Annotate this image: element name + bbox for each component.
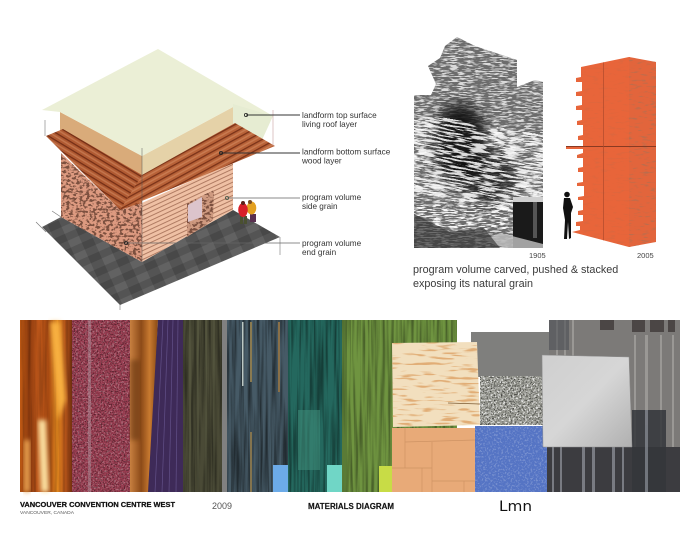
label: landform bottom surface: landform bottom surface <box>302 148 390 156</box>
landform bottom surface wood layer left <box>46 129 142 210</box>
1905 timber stack photo <box>414 37 543 248</box>
swatch: red fabric <box>72 320 130 492</box>
label: landform bottom surface: wood layer <box>301 156 342 166</box>
swatch: olive carpet <box>183 320 222 492</box>
caption: exposing its natural grain <box>413 278 533 290</box>
leader line: side grain <box>225 196 300 200</box>
program volume end grain wall <box>60 150 144 264</box>
program volume side grain wall <box>140 160 235 264</box>
footer <box>20 499 532 516</box>
swatch: purple fabric <box>148 320 183 492</box>
project location: VANCOUVER, CANADA <box>20 510 75 516</box>
label: end grain: end grain <box>302 248 337 257</box>
landform top surface <box>42 49 273 156</box>
swatch: strand board <box>390 340 482 430</box>
ground plane carpet <box>40 205 285 307</box>
swatch: copper fold <box>130 320 158 492</box>
project title: VANCOUVER CONVENTION CENTRE WEST <box>20 500 175 509</box>
swatch: dark carpet <box>546 320 680 492</box>
swatch: metal panel <box>542 355 632 447</box>
carved opening <box>187 190 214 237</box>
swatch: blue aggregate <box>475 426 547 492</box>
swatch: teal carpet <box>288 320 342 492</box>
label: landform top surface: landform top surface <box>302 111 377 120</box>
swatch: blue-grey carpet <box>227 320 288 492</box>
scale figures <box>238 200 256 224</box>
landform tan edge left <box>60 112 142 177</box>
divider strip <box>222 320 227 492</box>
leader line: wood layer <box>219 151 300 155</box>
swatch: orange end-grain wood <box>392 428 475 492</box>
construction lines <box>36 110 280 310</box>
2005 orange volume <box>560 55 657 250</box>
label: end grain: program volume <box>302 239 361 248</box>
diagram title: MATERIALS DIAGRAM <box>308 502 394 511</box>
landform bottom surface wood layer right <box>120 123 275 210</box>
colour chip: yellow-green <box>379 466 393 492</box>
living roof right overhang <box>233 103 273 140</box>
year: 2009 <box>212 501 232 512</box>
label: 2005: 2005 <box>637 251 654 260</box>
label: side grain: side grain <box>302 202 338 211</box>
logo: Lmn <box>499 499 532 515</box>
diagram labels <box>301 111 391 257</box>
colour chip: aqua <box>327 465 342 492</box>
person silhouette <box>563 192 573 239</box>
leader line: end grain <box>124 241 300 245</box>
axonometric building diagram <box>36 49 300 310</box>
swatch: grey panel <box>471 332 550 377</box>
label: landform top surface: living roof layer <box>302 120 357 129</box>
materials collage <box>20 320 680 492</box>
swatch: copper <box>20 320 72 492</box>
label: side grain: program volume <box>302 193 361 202</box>
leader line: living roof <box>244 113 300 117</box>
swatch: green carpet <box>342 320 457 492</box>
landform tan edge right <box>142 107 233 177</box>
colour chip: blue <box>273 465 288 492</box>
label: 1905: 1905 <box>529 251 546 260</box>
swatch: terrazzo <box>480 376 543 425</box>
caption: program volume carved, pushed & stacked <box>413 264 618 276</box>
